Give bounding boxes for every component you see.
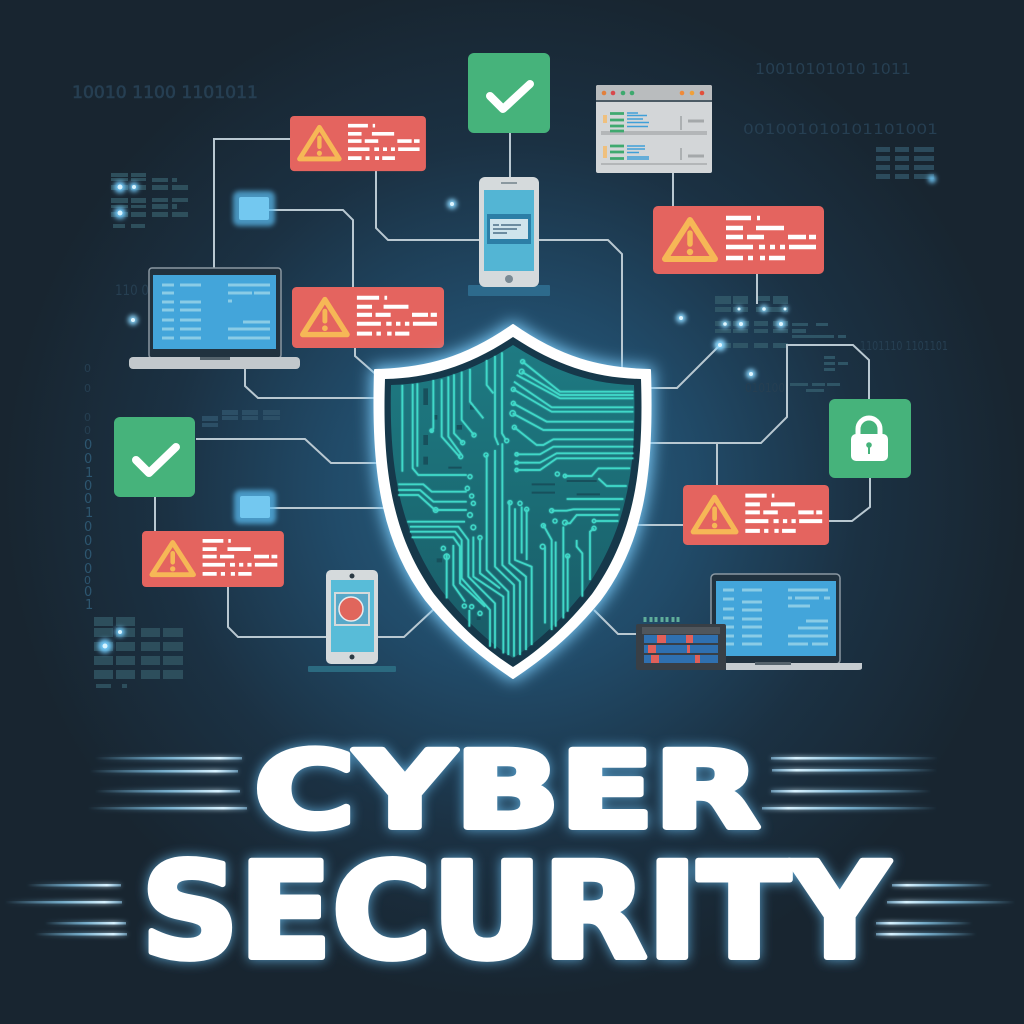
binary text: background digits: 1 (85, 466, 93, 481)
binary text: background digits: 0 (84, 574, 91, 587)
title: SECURITY (141, 835, 890, 989)
icon: green check left (114, 417, 195, 497)
icon: blue chip upper (233, 191, 275, 226)
icon: phone top (468, 177, 550, 296)
icon: browser window (596, 85, 712, 173)
glowing network nodes (128, 199, 756, 379)
icon: laptop left (129, 268, 300, 369)
icon: phone bottom (308, 570, 396, 672)
data grid center right (715, 296, 848, 392)
binary text: background digits: 10010101010 1011 (755, 60, 911, 78)
alert box: lower left (142, 531, 284, 587)
data grid upper middle left (202, 410, 280, 427)
binary text: background digits: 0 (84, 479, 92, 494)
icon: blue chip lower (234, 490, 276, 524)
title glow (141, 729, 890, 989)
binary text: background digits: 001001010101101001 (743, 122, 938, 138)
binary text: background digits: 0 (84, 520, 92, 535)
shield: dark border (385, 337, 641, 667)
data grid bottom left (94, 617, 183, 688)
data grid top left (111, 173, 188, 228)
binary text: background digits (72, 60, 948, 613)
binary text: background digits: 0 (84, 548, 92, 563)
binary text: background digits: 0 (84, 411, 91, 424)
speed lines: CYBER left (88, 757, 247, 810)
binary text: background digits: 0 (84, 382, 91, 395)
binary text: background digits: 0 (84, 438, 92, 453)
binary text: background digits: 10010 1100 1101011 (72, 83, 258, 103)
speed lines: SECURITY left (5, 884, 127, 936)
data grid top right (876, 147, 936, 183)
alert box: top left (290, 116, 426, 171)
binary text: background digits: 1 (85, 598, 93, 613)
binary text: background digits: 0 (84, 452, 92, 467)
shield: teal face (391, 345, 634, 658)
network connectors (155, 133, 870, 637)
binary text: background digits: 1101110 1101101 (860, 339, 948, 353)
binary text: background digits: 0 (84, 562, 92, 577)
shield: circuit traces (398, 352, 633, 657)
shield (374, 325, 651, 678)
binary text: background digits: 1 (85, 506, 93, 521)
icon: green padlock (829, 399, 911, 478)
alert box: top right (653, 206, 824, 274)
title glow: SECURITY (141, 835, 890, 989)
binary text: background digits: 0 (84, 424, 91, 437)
speed lines: SECURITY right (876, 884, 1015, 936)
icon: server rack (636, 617, 726, 670)
binary text: background digits: 010100 (745, 381, 785, 395)
binary text: background digits: 0 (84, 492, 92, 507)
binary text: background digits: 110 0 (115, 283, 149, 299)
speed lines: CYBER right (762, 757, 938, 810)
icon: laptop right (711, 574, 862, 670)
shield: white rim (374, 325, 651, 678)
binary text: background digits: 0 (84, 534, 92, 549)
shield: dark component specks (423, 388, 600, 620)
title glow: CYBER (254, 729, 760, 852)
alert box: middle left (292, 287, 444, 348)
title (141, 729, 890, 989)
binary text: background digits: 0 (84, 585, 92, 600)
shield: outer glow (374, 325, 651, 678)
binary text: background digits: 0 (84, 362, 91, 375)
title: CYBER (254, 729, 760, 852)
alert box: lower right (683, 485, 829, 545)
icon: green check top (468, 53, 550, 133)
